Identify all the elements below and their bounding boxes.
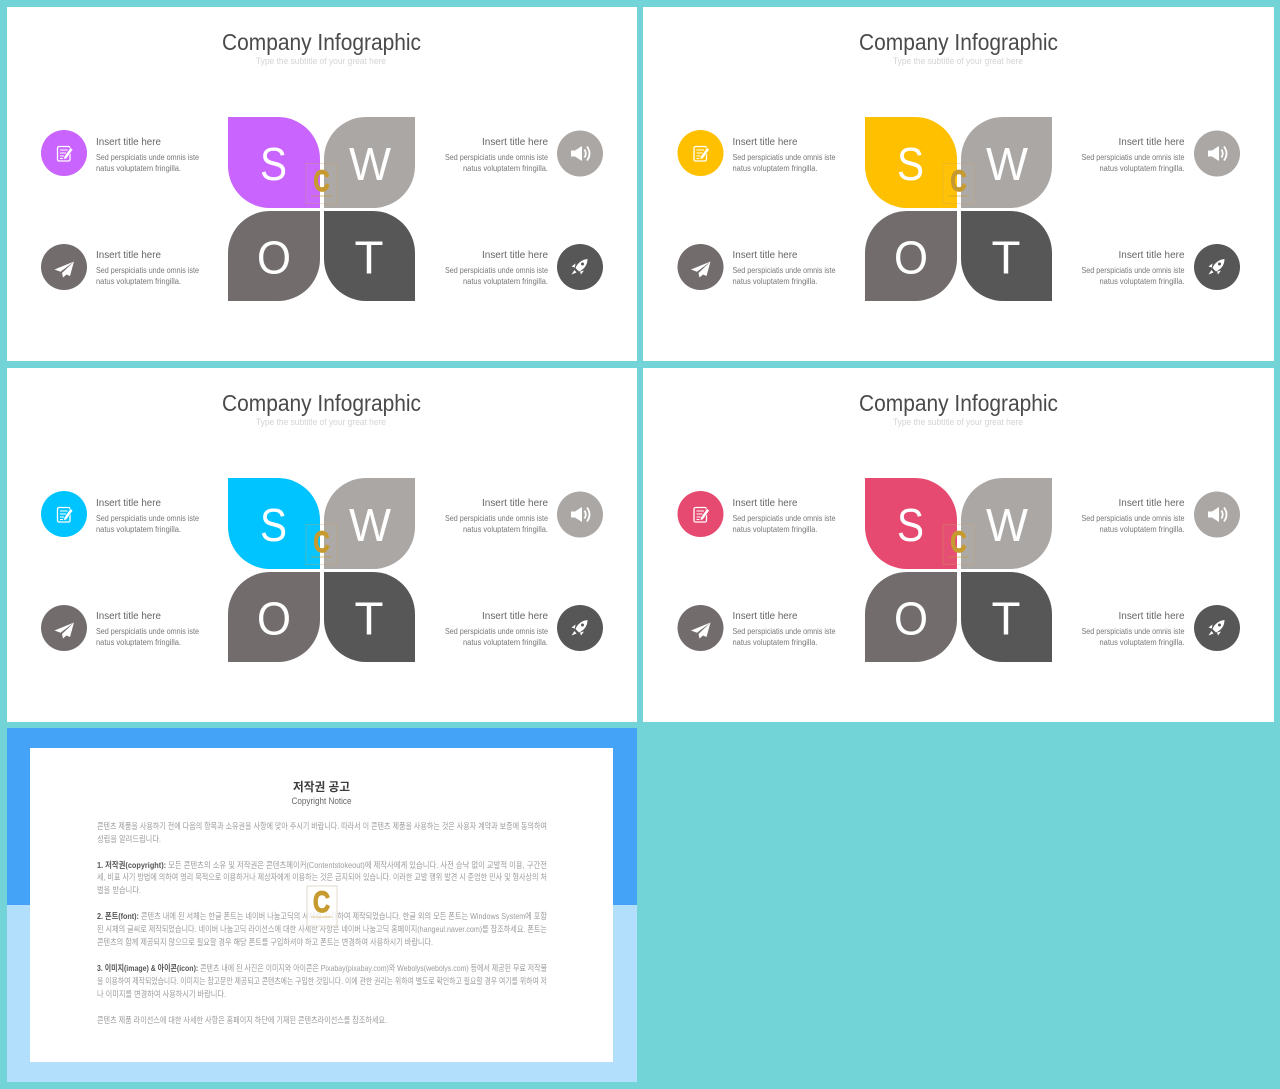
text: W item: natus voluptatem fringilla. <box>1100 164 1184 173</box>
heading: copyright notice: 저작권 공고 <box>293 779 350 794</box>
text: S item: natus voluptatem fringilla. <box>732 164 818 173</box>
text: T item <box>445 250 548 286</box>
text: S item: Sed perspiciatis unde omnis iste <box>732 514 836 523</box>
icon: rocket <box>557 605 603 651</box>
text: section 1 copyright: 세, 비표 사기 방법에 의하여 영리 목적으로 이용하거나 제삼자에게 이용하는 것은 금지되어 있습니다. 이러한 교발 행위 발견 시 준엄한 민사 및 형사상의 처 <box>97 872 547 882</box>
text: O item: natus voluptatem fringilla. <box>732 638 818 647</box>
text: intro paragraph: 콘텐츠 제품을 사용하기 전에 다음의 항목과 소유권을 사항에 맞아 주시기 바랍니다. 따라서 이 콘텐츠 제품을 사용하는 것은 사용자 계약과 보증에 동의하여 <box>97 821 547 831</box>
text: O item: Insert title here <box>732 250 798 261</box>
icon: rocket <box>1194 605 1240 651</box>
watermark: C <box>313 886 330 919</box>
icon: paper plane <box>678 605 724 651</box>
text: W item: natus voluptatem fringilla. <box>463 525 548 534</box>
text: section 2 font: 2. 폰트(font): 콘텐츠 내에 된 서체는 한글 폰트는 네이버 나눔고딕의 서체를 사용하여 제작되었습니다. 한글 외의 모든 폰트는 Windows System에 포함 <box>97 911 547 921</box>
text: section 2 font <box>97 911 547 947</box>
panel: SWOT slide cyan <box>7 368 637 722</box>
SWOT leaf O: O <box>894 232 928 284</box>
icon: speaker <box>1194 492 1240 538</box>
text: T item: Insert title here <box>482 250 548 261</box>
text: section 3 image and icon: 3. 이미지(image) & 아이콘(icon): 콘텐츠 내에 된 사진은 이미지와 아이콘은 Pixabay(pixabay.com)와 Webolys(webolys.com) 등에서 제공된 무료 저작물 <box>97 963 547 973</box>
panel: copyright notice slide <box>7 728 637 1082</box>
text: O item: Sed perspiciatis unde omnis iste <box>732 627 836 636</box>
SWOT leaf S: S <box>897 138 924 190</box>
text: intro paragraph <box>97 821 547 844</box>
text: section 1 copyright <box>97 860 547 895</box>
text: O item: Insert title here <box>732 611 798 622</box>
panel: SWOT slide purple <box>7 7 637 361</box>
text: O item: Sed perspiciatis unde omnis iste <box>732 266 836 275</box>
SWOT leaf O <box>865 572 957 662</box>
SWOT leaf T: T <box>354 592 384 644</box>
SWOT leaf S: S <box>260 138 287 190</box>
text: T item <box>1082 250 1185 286</box>
text: closing line: 콘텐츠 제품 라이선스에 대한 사세한 사항은 홈페이지 하단에 기재된 콘텐츠라이선스를 참조하세요. <box>97 1015 387 1025</box>
text: O item: Sed perspiciatis unde omnis iste <box>96 627 199 636</box>
text: section 3 image and icon: 나 이미지를 변경하여 사용하시기 바랍니다. <box>97 989 226 999</box>
SWOT leaf O <box>228 211 320 301</box>
text: W item: Insert title here <box>1118 498 1185 509</box>
SWOT leaf W: W <box>349 138 392 190</box>
text: W item: Sed perspiciatis unde omnis iste <box>1082 514 1185 523</box>
icon: note <box>678 130 724 176</box>
text: T item: Insert title here <box>1118 250 1185 261</box>
text: T item: Sed perspiciatis unde omnis iste <box>445 266 548 275</box>
text: O item: Insert title here <box>96 250 161 261</box>
text: intro paragraph: 성립을 알려드립니다. <box>97 834 161 844</box>
text: O item: natus voluptatem fringilla. <box>732 277 818 286</box>
SWOT leaf W: W <box>349 499 392 551</box>
text: S item: Insert title here <box>96 498 161 509</box>
text: S item <box>96 498 199 534</box>
text: S item: Insert title here <box>732 498 798 509</box>
text: T item: Sed perspiciatis unde omnis iste <box>445 627 548 636</box>
SWOT leaf T: T <box>992 232 1020 284</box>
watermark <box>943 524 974 564</box>
text: section 1 copyright: 벌을 받습니다. <box>97 885 141 895</box>
text: T item <box>1082 611 1185 647</box>
SWOT leaf W: W <box>986 499 1029 551</box>
text: S item: Sed perspiciatis unde omnis iste <box>96 514 199 523</box>
SWOT leaf T <box>961 211 1052 301</box>
icon: speaker <box>557 130 603 176</box>
text: T item: Insert title here <box>482 611 548 622</box>
text: W item <box>445 137 548 173</box>
text: section 3 image and icon: 을 이용하여 제작되었습니다. 이미지는 참고문만 제공되고 콘텐츠에는 구입한 것입니다. 이에 관한 권리는 위하여 별도로 확인하고 필요할 경우 여기를 위하여 저 <box>97 976 547 986</box>
panel: SWOT slide pink <box>643 368 1274 722</box>
text: O item: Insert title here <box>96 611 161 622</box>
text: W item: Insert title here <box>482 498 548 509</box>
text: S item <box>732 498 836 534</box>
SWOT leaf W <box>324 478 415 569</box>
text: O item <box>732 250 836 286</box>
SWOT leaf S <box>865 117 957 208</box>
watermark: C <box>950 165 966 198</box>
text: O item: Sed perspiciatis unde omnis iste <box>96 266 199 275</box>
icon: rocket <box>1194 244 1240 290</box>
title: Company Infographic <box>222 390 421 416</box>
text: W item: Sed perspiciatis unde omnis iste <box>445 153 548 162</box>
SWOT leaf T: T <box>354 232 384 284</box>
icon: paper plane <box>41 605 87 651</box>
text: O item: natus voluptatem fringilla. <box>96 638 181 647</box>
SWOT leaf O: O <box>257 592 291 644</box>
SWOT leaf S: S <box>897 499 924 551</box>
SWOT leaf T <box>324 211 415 301</box>
watermark: C <box>314 165 330 198</box>
text: section 2 font: 된 시체의 글씨로 제작되었습니다. 네이버 나눔고딕 라이선스에 대한 사세한 사항은 네이버 나눔고딕 홈페이지(hangeul.naver.com)를 참조하세요. 폰트는 <box>97 924 547 934</box>
subtitle: Type the subtitle of your great here <box>893 417 1023 427</box>
subtitle: Type the subtitle of your great here <box>893 56 1023 66</box>
text: T item <box>445 611 548 647</box>
text: T item: natus voluptatem fringilla. <box>463 638 548 647</box>
text: S item: Sed perspiciatis unde omnis iste <box>96 153 199 162</box>
text: W item: Insert title here <box>482 137 548 148</box>
text: W item: natus voluptatem fringilla. <box>463 164 548 173</box>
text: S item: natus voluptatem fringilla. <box>96 164 181 173</box>
SWOT leaf W: W <box>986 138 1029 190</box>
text: W item: natus voluptatem fringilla. <box>1100 525 1184 534</box>
title: Company Infographic <box>859 29 1058 55</box>
title: Company Infographic <box>859 390 1058 416</box>
SWOT leaf O <box>228 572 320 662</box>
text: W item: Sed perspiciatis unde omnis iste <box>445 514 548 523</box>
text: O item <box>732 611 836 647</box>
SWOT leaf S <box>228 117 320 208</box>
icon: rocket <box>557 244 603 290</box>
SWOT leaf S: S <box>260 499 287 551</box>
text: T item: natus voluptatem fringilla. <box>1100 638 1184 647</box>
subtitle: Type the subtitle of your great here <box>256 56 386 66</box>
SWOT leaf T: T <box>992 592 1020 644</box>
SWOT leaf S <box>865 478 957 569</box>
watermark <box>943 164 974 204</box>
text: S item: Insert title here <box>96 137 161 148</box>
icon: note <box>678 491 724 537</box>
SWOT leaf W <box>324 117 415 208</box>
text: S item <box>96 137 199 173</box>
text: S item: natus voluptatem fringilla. <box>96 525 181 534</box>
heading: copyright notice <box>292 779 352 806</box>
text: W item <box>1082 498 1185 534</box>
SWOT leaf W <box>961 478 1052 569</box>
text: W item <box>445 498 548 534</box>
SWOT leaf S <box>228 478 320 569</box>
text: S item: Insert title here <box>732 137 798 148</box>
text: T item: Sed perspiciatis unde omnis iste <box>1082 266 1185 275</box>
text: section 2 font: 콘텐츠의 함께 제공되지 않으므로 필요할 경우 해당 폰트를 구입하셔야 하고 폰트는 변경하여 사용하시기 바랍니다. <box>97 937 433 947</box>
text: T item: natus voluptatem fringilla. <box>463 277 548 286</box>
SWOT leaf T <box>324 572 415 662</box>
watermark: C <box>950 526 966 559</box>
icon: paper plane <box>41 244 87 290</box>
text: O item: natus voluptatem fringilla. <box>96 277 181 286</box>
text: T item: Insert title here <box>1118 611 1185 622</box>
SWOT leaf W <box>961 117 1052 208</box>
watermark <box>306 524 337 564</box>
watermark <box>306 164 337 204</box>
text: S item <box>732 137 836 173</box>
text: O item <box>96 250 199 286</box>
watermark <box>307 886 337 926</box>
SWOT leaf T <box>961 572 1052 662</box>
icon: paper plane <box>678 244 724 290</box>
icon: note <box>41 491 87 537</box>
SWOT leaf O: O <box>894 592 928 644</box>
text: T item: Sed perspiciatis unde omnis iste <box>1082 627 1185 636</box>
icon: speaker <box>557 492 603 538</box>
text: S item: natus voluptatem fringilla. <box>732 525 818 534</box>
text: W item: Sed perspiciatis unde omnis iste <box>1082 153 1185 162</box>
text: W item: Insert title here <box>1118 137 1185 148</box>
icon: speaker <box>1194 130 1240 176</box>
panel: SWOT slide yellow <box>643 7 1274 361</box>
subtitle: Type the subtitle of your great here <box>256 417 386 427</box>
text: S item: Sed perspiciatis unde omnis iste <box>732 153 836 162</box>
title: Company Infographic <box>222 29 421 55</box>
text: W item <box>1082 137 1185 173</box>
SWOT leaf O: O <box>257 232 291 284</box>
heading: copyright notice: Copyright Notice <box>292 796 352 806</box>
text: section 1 copyright: 1. 저작권(copyright): 모든 콘텐츠의 소유 및 저작권은 콘텐츠메이커(Contentstokeout)에 제작사에게 있습니다. 사전 승낙 없이 교발적 이용, 구간전 <box>97 860 547 870</box>
text: section 3 image and icon <box>97 963 547 999</box>
icon: note <box>41 130 87 176</box>
SWOT leaf O <box>865 211 957 301</box>
text: O item <box>96 611 199 647</box>
watermark: C <box>314 526 330 559</box>
text: T item: natus voluptatem fringilla. <box>1100 277 1184 286</box>
